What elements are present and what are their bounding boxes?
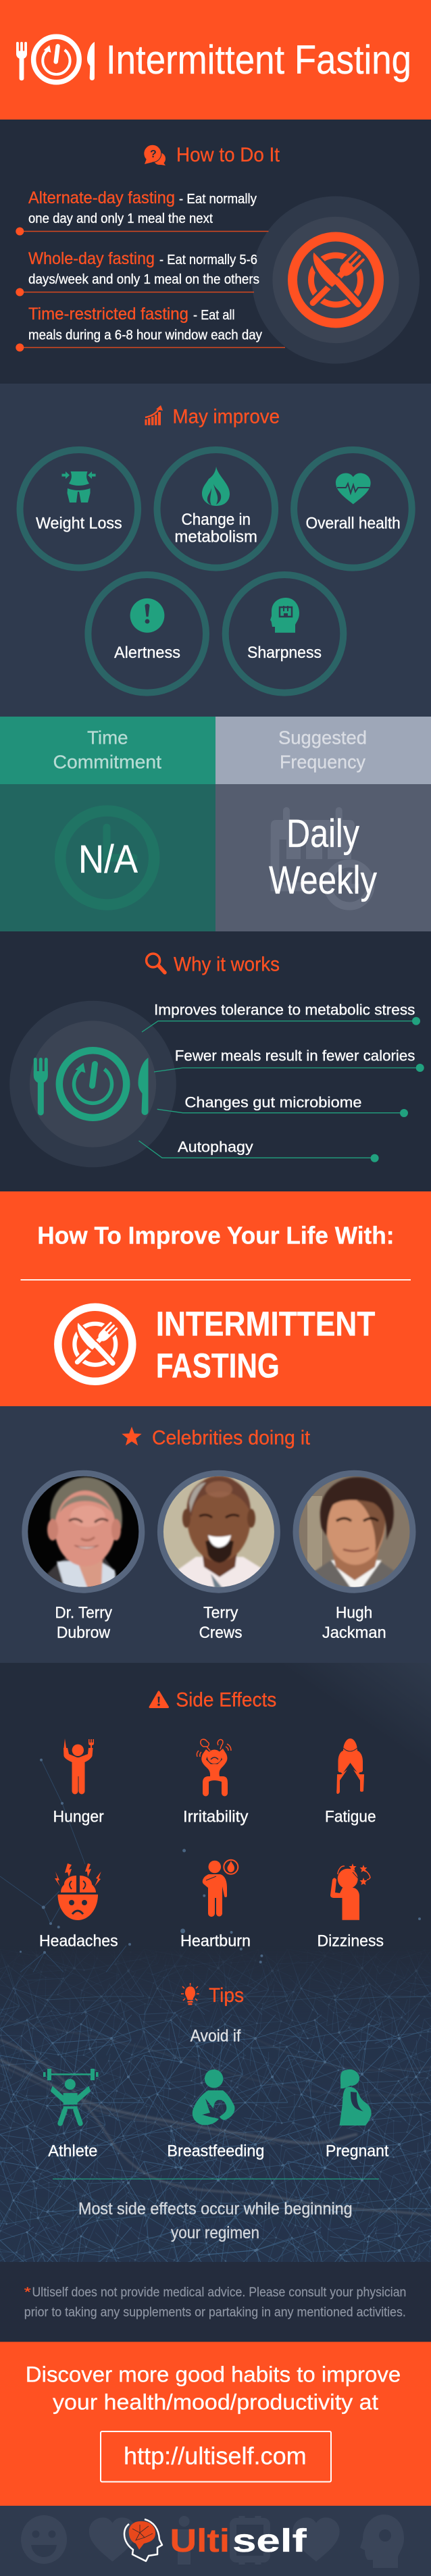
effect: dizziness: Dizziness [318, 1932, 384, 1951]
call to action text [26, 2363, 401, 2414]
benefit: change in metabolism: metabolism [174, 527, 257, 546]
effect: headaches: Headaches [39, 1932, 118, 1951]
call to action text: Discover more good habits to improve [26, 2363, 401, 2387]
item: alternate-day fasting: - Eat normally [179, 192, 257, 207]
reason: autophagy [139, 1139, 379, 1162]
icon: star [122, 1426, 142, 1445]
value: N/A [78, 838, 138, 881]
panel: how to do it [0, 120, 431, 384]
effect: irritability: Irritability [183, 1807, 248, 1826]
item: alternate-day fasting: Alternate-day fasting [28, 188, 175, 207]
disclaimer text [24, 2286, 406, 2319]
subject: FASTING [156, 1346, 280, 1385]
disclaimer text: prior to taking any supplements or partaking in any mentioned activities. [24, 2305, 406, 2319]
reason: metabolic stress: Improves tolerance to metabolic stress [154, 1001, 415, 1018]
benefit: alertness: Alertness [114, 644, 180, 662]
panel: suggested frequency [216, 717, 431, 931]
names: Dr. Terry [55, 1604, 112, 1622]
tip text [78, 2199, 353, 2242]
avoid: pregnant: Pregnant [326, 2142, 389, 2161]
names: Jackman [322, 1624, 386, 1642]
label [278, 727, 367, 772]
icon: exclamation [130, 598, 164, 633]
subheading: Avoid if [191, 2026, 240, 2045]
benefit: weight loss: Weight Loss [36, 515, 122, 533]
panel: celebrities [0, 1406, 431, 1663]
icon: waist [62, 471, 96, 503]
icon: heart pulse [336, 473, 371, 505]
heading: How To Improve Your Life With: [37, 1222, 395, 1250]
faint icons [21, 2515, 404, 2568]
label: Commitment [53, 751, 161, 772]
plate illustration [252, 196, 420, 363]
effect: heartburn [180, 1860, 251, 1951]
heading: May improve [173, 406, 280, 428]
value [269, 812, 377, 902]
label: Time [87, 727, 128, 748]
benefit: change in metabolism: Change in [181, 511, 251, 529]
subject: INTERMITTENT [156, 1304, 375, 1343]
icon: head with chip [270, 598, 299, 633]
label: Frequency [280, 751, 365, 772]
item: whole-day fasting: Whole-day fasting [28, 249, 155, 268]
portrait: Dr. Terry Dubrow [25, 1473, 142, 1590]
effect: fatigue [325, 1738, 376, 1826]
effect: irritability [183, 1739, 248, 1826]
effect: dizziness [318, 1863, 384, 1951]
icon: no eating [58, 1307, 132, 1381]
benefit: change in metabolism [157, 450, 275, 568]
avoid: athlete [43, 2069, 99, 2161]
reason: gut microbiome: Changes gut microbiome [184, 1093, 362, 1110]
names: Hugh [336, 1604, 372, 1622]
panel: side effects and tips [0, 1663, 431, 2262]
icon: rising chart [145, 405, 163, 426]
avoid: athlete: Athlete [48, 2142, 97, 2161]
benefit: sharpness [226, 575, 343, 693]
item: time-restricted fasting: - Eat all [193, 308, 235, 323]
panel: time commitment [0, 717, 216, 931]
subject [156, 1304, 375, 1385]
logo: Ultiself: self [232, 2523, 307, 2559]
call to action text: your health/mood/productivity at [53, 2390, 378, 2414]
logo: Ultiself: Ulti [170, 2523, 230, 2559]
value: Weekly [269, 858, 377, 902]
icon: fork, plate and knife [16, 36, 95, 82]
url button [101, 2431, 331, 2481]
icon: question bubbles [144, 145, 166, 165]
item: time-restricted fasting: Time-restricted fasting [28, 305, 188, 324]
panel: why it works [0, 931, 431, 1191]
icon: slumped person [336, 1738, 364, 1794]
item: alternate-day fasting [16, 188, 269, 235]
icon: magnifier [147, 954, 165, 973]
icon: nursing mother [193, 2069, 234, 2125]
heading: How to Do It [176, 144, 280, 166]
reason: gut microbiome [157, 1093, 408, 1117]
item: alternate-day fasting: one day and only 1 meal the next [28, 211, 213, 226]
avoid: breastfeeding [167, 2069, 264, 2161]
icon: person with burning chest [203, 1860, 238, 1917]
icon: angry person [197, 1739, 231, 1797]
panel: footer [0, 2506, 431, 2576]
effect: hunger [53, 1738, 104, 1826]
label [53, 727, 161, 772]
icon: weightlifter [43, 2069, 99, 2123]
icon: brain and bolts [55, 1863, 101, 1920]
plate illustration [9, 1001, 176, 1167]
header banner [0, 0, 431, 120]
tip text: Most side effects occur while beginning [78, 2199, 353, 2218]
benefit: overall health [294, 450, 412, 568]
portrait: Hugh Jackman [296, 1473, 413, 1590]
heading: Side Effects [176, 1689, 276, 1711]
logo: Ultiself [124, 2519, 307, 2561]
effect: heartburn: Heartburn [180, 1932, 251, 1951]
effect: hunger: Hunger [53, 1807, 104, 1826]
item: whole-day fasting [16, 249, 259, 296]
benefit: alertness [88, 575, 206, 693]
disclaimer text: Ultiself does not provide medical advice. Please consult your physician [32, 2286, 406, 2300]
disclaimer text: * [24, 2286, 32, 2300]
item: whole-day fasting: - Eat normally 5-6 [159, 253, 257, 267]
names: Crews [199, 1624, 242, 1642]
tip text: your regimen [171, 2223, 259, 2242]
icon: brain head [124, 2519, 162, 2561]
panel: may improve [0, 384, 431, 717]
benefit: sharpness: Sharpness [247, 644, 322, 662]
reason: metabolic stress [142, 1001, 420, 1032]
url button: http://ultiself.com [124, 2442, 307, 2469]
reason: autophagy: Autophagy [178, 1139, 253, 1156]
icon: question bubbles: ? [150, 149, 157, 160]
names [55, 1604, 386, 1642]
names: Terry [203, 1604, 238, 1622]
benefit: overall health: Overall health [305, 515, 401, 533]
effect: fatigue: Fatigue [325, 1807, 376, 1826]
names: Dubrow [57, 1624, 111, 1642]
panel: how to improve banner [0, 1191, 431, 1406]
item: time-restricted fasting: meals during a 6-8 hour window each day [28, 328, 262, 343]
heading: Celebrities doing it [152, 1426, 311, 1449]
label: Suggested [278, 727, 367, 748]
avoid: breastfeeding: Breastfeeding [167, 2142, 264, 2161]
avoid: pregnant [326, 2069, 389, 2161]
heading: Why it works [174, 954, 280, 976]
value: Daily [286, 812, 359, 856]
icon: faint calendar [271, 810, 371, 906]
icon: pregnant woman [339, 2069, 372, 2126]
benefit: weight loss [20, 450, 138, 568]
reason: fewer calories [154, 1048, 424, 1072]
icon: light bulb [181, 1983, 199, 2005]
reason: fewer calories: Fewer meals result in fewer calories [175, 1048, 415, 1064]
portrait: Terry Crews [160, 1473, 277, 1590]
heading: Tips [209, 1984, 244, 2007]
panel: disclaimer [0, 2262, 431, 2342]
icon: flame [202, 467, 230, 506]
icon: faint clock [60, 810, 154, 905]
icon: warning triangle [150, 1692, 168, 1707]
effect: headaches [39, 1863, 118, 1951]
icon: dizzy person [330, 1863, 370, 1920]
item: whole-day fasting: days/week and only 1 meal on the others [28, 272, 259, 287]
panel: call to action [0, 2342, 431, 2506]
item: time-restricted fasting [16, 305, 285, 351]
icon: person holding cutlery [64, 1738, 94, 1794]
